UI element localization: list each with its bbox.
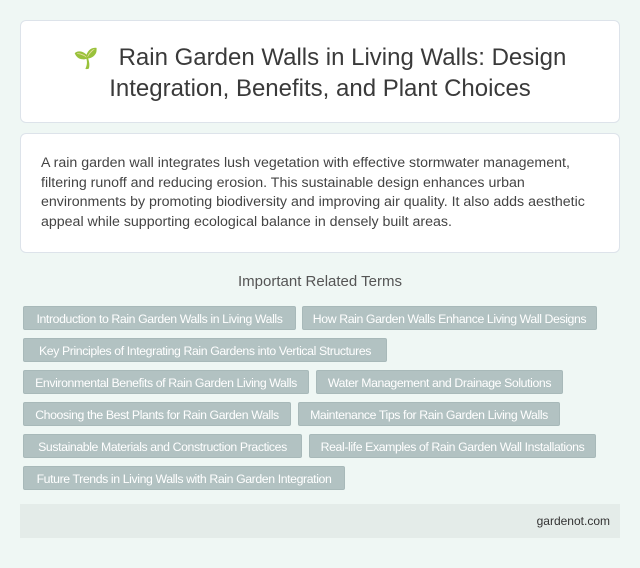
tag 9 <box>309 434 596 458</box>
title card <box>20 20 620 123</box>
description text: A rain garden wall integrates lush vegetation with effective stormwater management, filtering runoff and reducing erosion. This sustainable design enhances urban environments by promoting biodiversity and improving air quality. It also adds aesthetic appeal while supporting ecological balance in densely built areas. <box>41 155 585 230</box>
tag 8: Sustainable Materials and Construction Practices <box>38 440 287 454</box>
tag 6 <box>23 402 291 426</box>
tag 2: How Rain Garden Walls Enhance Living Wall Designs <box>313 312 586 326</box>
tag 7: Maintenance Tips for Rain Garden Living Walls <box>310 408 548 422</box>
tag 6: Choosing the Best Plants for Rain Garden Walls <box>35 408 279 422</box>
tag 4 <box>23 370 309 394</box>
title: 🌱 Rain Garden Walls in Living Walls: Design Integration, Benefits, and Plant Choices <box>74 44 566 102</box>
tag 2 <box>302 306 597 330</box>
tag 7 <box>298 402 560 426</box>
footer source: gardenot.com <box>537 514 610 528</box>
footer <box>20 504 620 538</box>
tag 4: Environmental Benefits of Rain Garden Living Walls <box>35 376 297 390</box>
tag 9: Real-life Examples of Rain Garden Wall Installations <box>321 440 584 454</box>
tag 8 <box>23 434 302 458</box>
tag 5 <box>316 370 563 394</box>
tag 3 <box>23 338 387 362</box>
section heading: Important Related Terms <box>238 273 402 290</box>
tag 10 <box>23 466 345 490</box>
tag 10: Future Trends in Living Walls with Rain Garden Integration <box>37 472 331 486</box>
tag 1: Introduction to Rain Garden Walls in Living Walls <box>36 312 283 326</box>
tag 3: Key Principles of Integrating Rain Gardens into Vertical Structures <box>39 344 371 358</box>
tag 1 <box>23 306 296 330</box>
tag 5: Water Management and Drainage Solutions <box>328 376 551 390</box>
description card <box>20 133 620 253</box>
